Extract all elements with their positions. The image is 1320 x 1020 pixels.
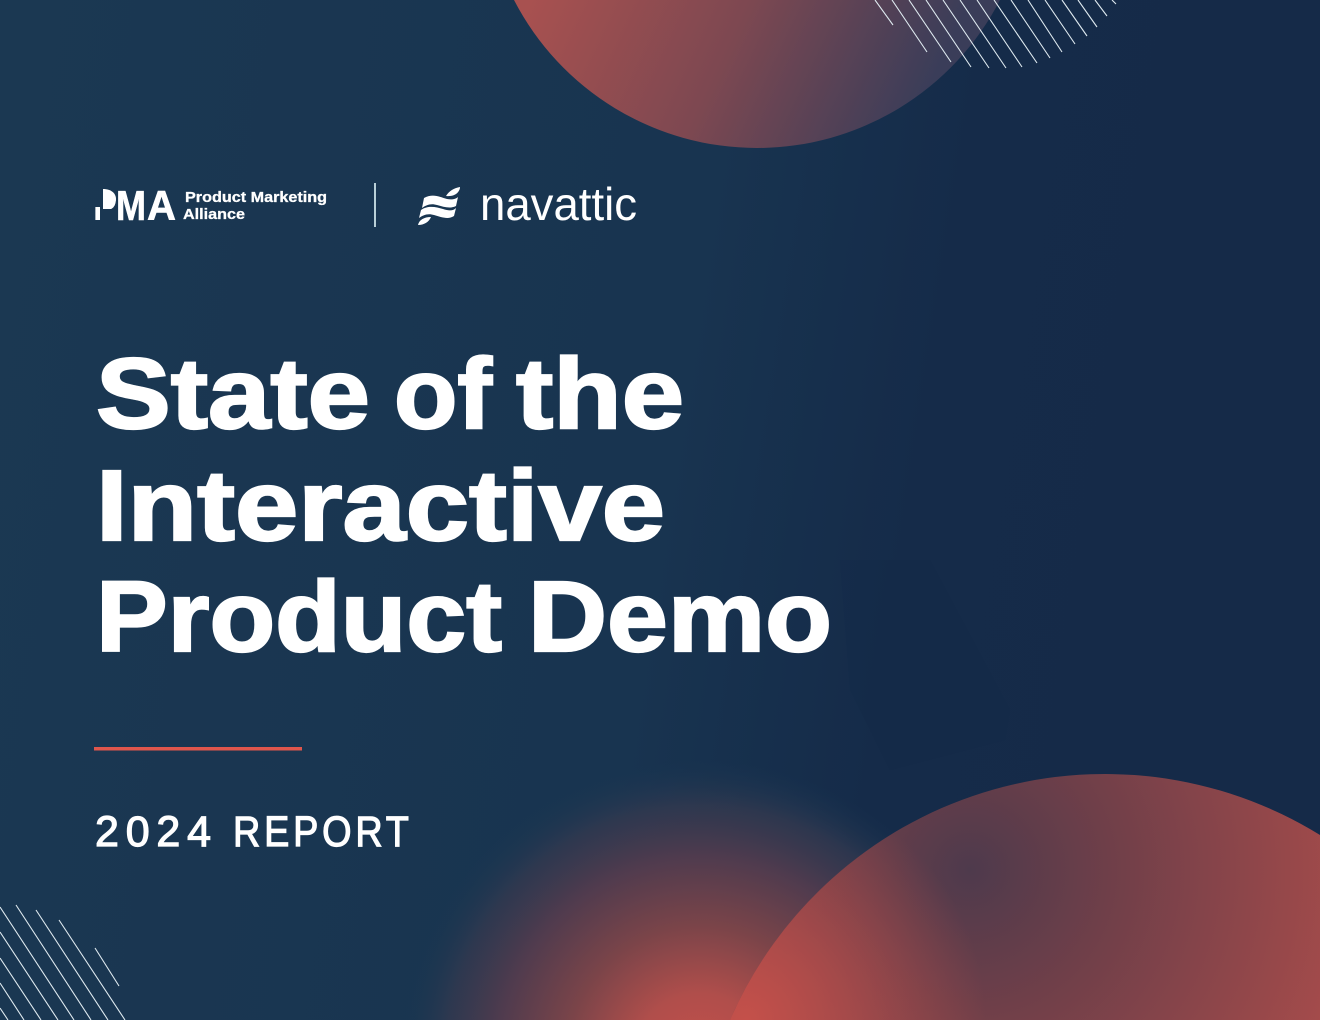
hatch lines top right [875, 0, 1116, 68]
title: Product [96, 561, 502, 673]
subtitle: REPORT [233, 807, 413, 856]
accent rule [94, 747, 302, 750]
decorative circle bottom right [730, 774, 1320, 1020]
title: State [96, 338, 370, 450]
subtitle [95, 807, 413, 856]
hatch lines bottom left [0, 905, 125, 1020]
title: of [394, 338, 493, 450]
logo: Product Marketing Alliance: P [93, 182, 117, 229]
icon: navattic waves [418, 187, 460, 225]
logo wordmark: navattic: navattic [480, 178, 637, 230]
logo divider [374, 183, 376, 227]
decorative circle top [514, 0, 1000, 148]
subtitle: 2024 [95, 808, 211, 856]
logo: Product Marketing Alliance: Product Marketing [185, 189, 327, 206]
logo: Product Marketing Alliance: A [147, 182, 176, 229]
logo: Product Marketing Alliance: M [116, 182, 146, 229]
title: the [516, 338, 684, 450]
logo: Product Marketing Alliance [95, 189, 326, 220]
logo: Product Marketing Alliance: Alliance [183, 206, 245, 223]
decorative blurred circle bottom centre [400, 760, 1000, 1020]
title: Demo [528, 561, 832, 673]
title [96, 338, 832, 673]
title: Interactive [96, 450, 665, 562]
